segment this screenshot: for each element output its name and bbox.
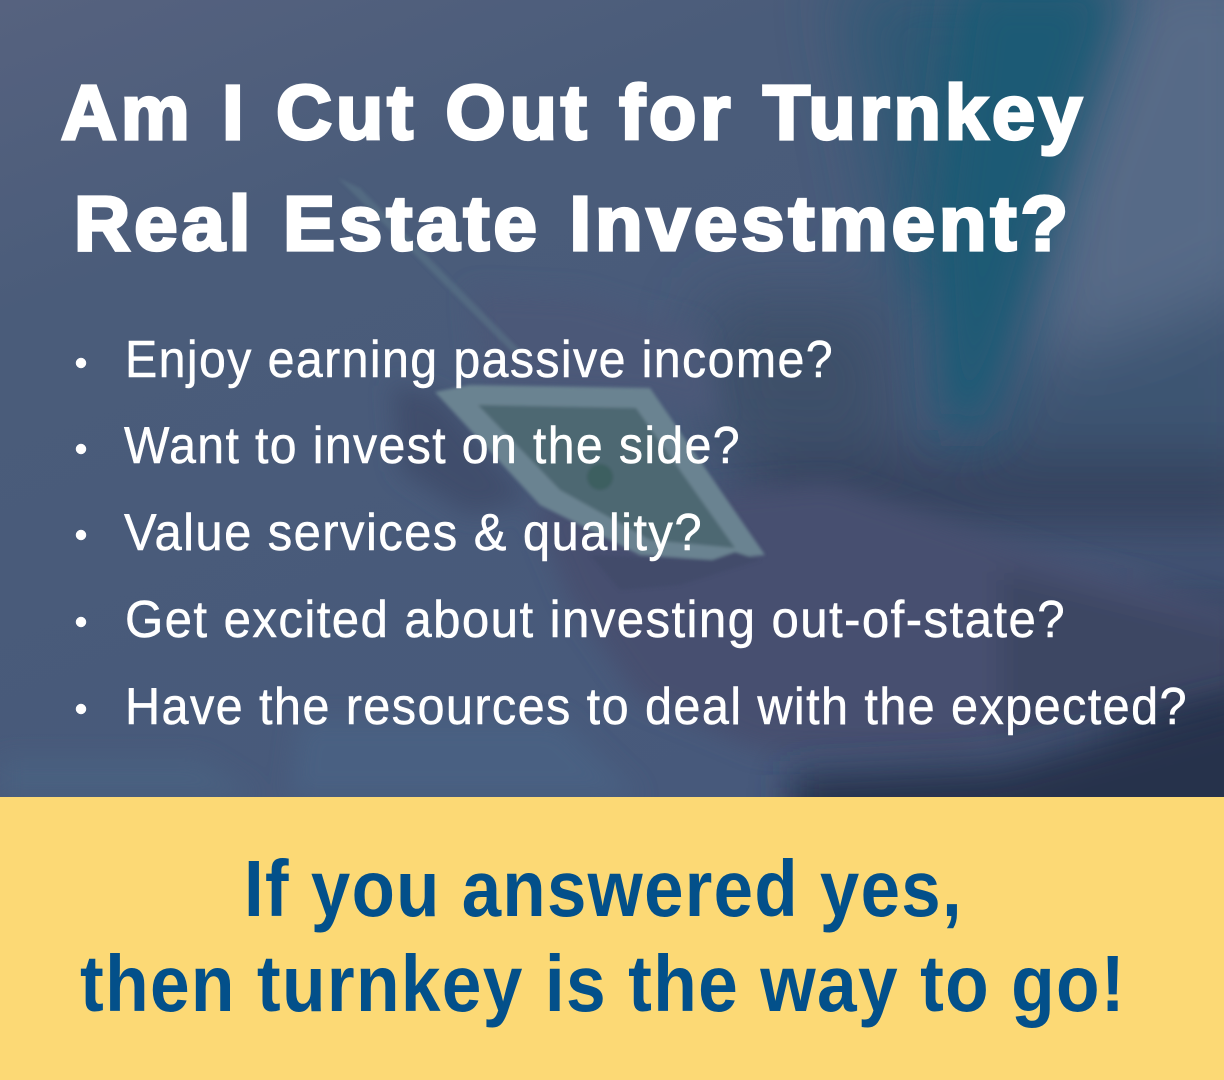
panel: yellow conclusion banner (0, 797, 1224, 1080)
conclusion text: then turnkey is the way to go! (80, 939, 1126, 1028)
conclusion text (80, 844, 1126, 1028)
question 3: Value services & quality? (124, 504, 703, 562)
question 1: Enjoy earning passive income? (125, 331, 834, 389)
checklist of questions (76, 331, 1188, 736)
title: Real Estate Investment? (74, 181, 1072, 267)
title (61, 70, 1086, 267)
title: Am I Cut Out for Turnkey (61, 70, 1086, 156)
question 4: Get excited about investing out-of-state? (125, 591, 1066, 649)
panel: blurred photo background of hands holding cash (0, 0, 1224, 840)
conclusion text: If you answered yes, (244, 844, 963, 933)
question 2: Want to invest on the side? (124, 417, 741, 475)
